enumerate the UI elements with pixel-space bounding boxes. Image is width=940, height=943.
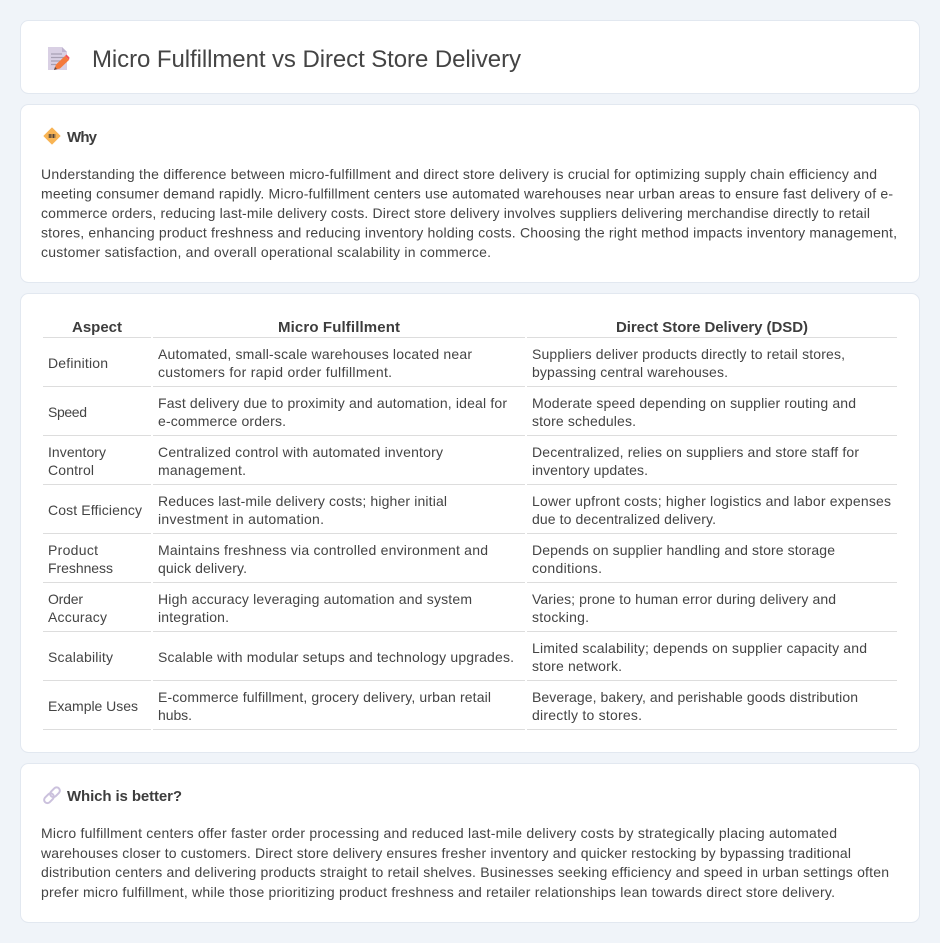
panel: title header	[20, 20, 920, 94]
row: example uses: hubs.	[158, 707, 192, 723]
row: order accuracy: integration.	[158, 609, 229, 625]
row: definition: Suppliers deliver products directly to retail stores,	[532, 346, 845, 362]
text block: verdict: prefer micro fulfillment, while those prioritizing product freshness and retailer relationships lean towards direct store delivery.	[41, 884, 835, 900]
row: inventory control	[43, 444, 897, 485]
icon: chain link	[43, 786, 61, 804]
row: product freshness: Freshness	[48, 560, 113, 576]
row: scalability: store network.	[532, 658, 622, 674]
row: inventory control: Centralized control with automated inventory	[158, 444, 443, 460]
text block: why explanation: meeting consumer demand rapidly. Micro-fulfillment centers use automated warehouses near urban areas to ensure fast delivery of e-	[41, 186, 893, 202]
row: speed	[43, 395, 897, 436]
row: inventory control: Inventory	[48, 444, 106, 460]
text block: why explanation: commerce orders, reducing last-mile delivery costs. Direct store delivery involves suppliers delivering merchandise directly to retail	[41, 205, 870, 221]
row: example uses: directly to stores.	[532, 707, 642, 723]
row: definition	[43, 346, 897, 387]
text block: verdict	[40, 825, 889, 900]
row: scalability: Scalable with modular setups and technology upgrades.	[158, 649, 514, 665]
row: scalability	[43, 640, 897, 681]
text block: verdict: distribution centers and delivering products straight to retail shelves. Businesses seeking efficiency and speed in urban settings often	[41, 864, 889, 880]
row: speed: e-commerce orders.	[158, 413, 286, 429]
row: example uses: Beverage, bakery, and perishable goods distribution	[532, 689, 858, 705]
row: order accuracy: Accuracy	[48, 609, 107, 625]
row: definition: customers for rapid order fulfillment.	[158, 364, 392, 380]
text block: verdict: warehouses closer to customers. Direct store delivery ensures fresher inventory and quicker restocking by bypassing traditional	[40, 845, 851, 861]
table header row	[43, 319, 897, 338]
row: inventory control: Decentralized, relies on suppliers and store staff for	[532, 444, 859, 460]
row: product freshness: Product	[48, 542, 98, 558]
row: cost efficiency: investment in automation.	[158, 511, 324, 527]
row: cost efficiency: Reduces last-mile delivery costs; higher initial	[158, 493, 447, 509]
row: inventory control: inventory updates.	[532, 462, 648, 478]
icon: document with pencil	[48, 47, 70, 70]
row: example uses	[43, 689, 897, 730]
text block: why explanation: customer satisfaction, and overall operational scalability in commerce.	[41, 244, 491, 260]
row: product freshness: Depends on supplier handling and store storage	[532, 542, 835, 558]
table header row: Direct Store Delivery (DSD)	[616, 319, 808, 336]
text block: why explanation: Understanding the difference between micro-fulfillment and direct store delivery is crucial for optimizing supply chain efficiency and	[41, 166, 877, 182]
text block: verdict: Micro fulfillment centers offer faster order processing and reduced last-mile delivery costs by strategically placing automated	[41, 825, 837, 841]
row: order accuracy: Varies; prone to human error during delivery and	[532, 591, 836, 607]
row: speed: store schedules.	[532, 413, 636, 429]
row: speed: Speed	[48, 404, 87, 420]
row: order accuracy: High accuracy leveraging automation and system	[158, 591, 472, 607]
text block: why explanation	[41, 166, 897, 260]
row: product freshness: quick delivery.	[158, 560, 247, 576]
row: definition: Automated, small-scale warehouses located near	[158, 346, 472, 362]
panel: which is better	[20, 764, 920, 922]
row: cost efficiency: Lower upfront costs; higher logistics and labor expenses	[532, 493, 891, 509]
row: scalability: Limited scalability; depends on supplier capacity and	[532, 640, 867, 656]
panel: comparison table	[20, 294, 920, 752]
row: scalability: Scalability	[48, 649, 113, 665]
icon: orange diamond sign	[44, 128, 60, 144]
text block: why explanation: stores, enhancing product freshness and reducing inventory holding costs. Choosing the right method impacts inventory management,	[41, 225, 897, 241]
heading: which is better: Which is better?	[67, 788, 182, 805]
row: example uses: E-commerce fulfillment, grocery delivery, urban retail	[158, 689, 491, 705]
row: cost efficiency	[43, 493, 897, 534]
row: cost efficiency: due to decentralized delivery.	[532, 511, 716, 527]
panel: why	[20, 104, 920, 282]
table header row: Aspect	[72, 319, 122, 336]
row: cost efficiency: Cost Efficiency	[48, 502, 142, 518]
row: order accuracy: Order	[48, 591, 83, 607]
row: definition: bypassing central warehouses.	[532, 364, 728, 380]
table header row: Micro Fulfillment	[278, 319, 400, 336]
row: inventory control: Control	[48, 462, 94, 478]
row: speed: Fast delivery due to proximity and automation, ideal for	[158, 395, 507, 411]
row: definition: Definition	[48, 355, 108, 371]
heading: why: Why	[67, 129, 98, 146]
row: order accuracy	[43, 591, 897, 632]
row: order accuracy: stocking.	[532, 609, 589, 625]
row: product freshness: conditions.	[532, 560, 602, 576]
row: speed: Moderate speed depending on supplier routing and	[532, 395, 856, 411]
row: product freshness	[43, 542, 897, 583]
title: Micro Fulfillment vs Direct Store Delivery	[92, 46, 521, 73]
row: inventory control: management.	[158, 462, 246, 478]
row: product freshness: Maintains freshness via controlled environment and	[158, 542, 488, 558]
row: example uses: Example Uses	[48, 698, 138, 714]
